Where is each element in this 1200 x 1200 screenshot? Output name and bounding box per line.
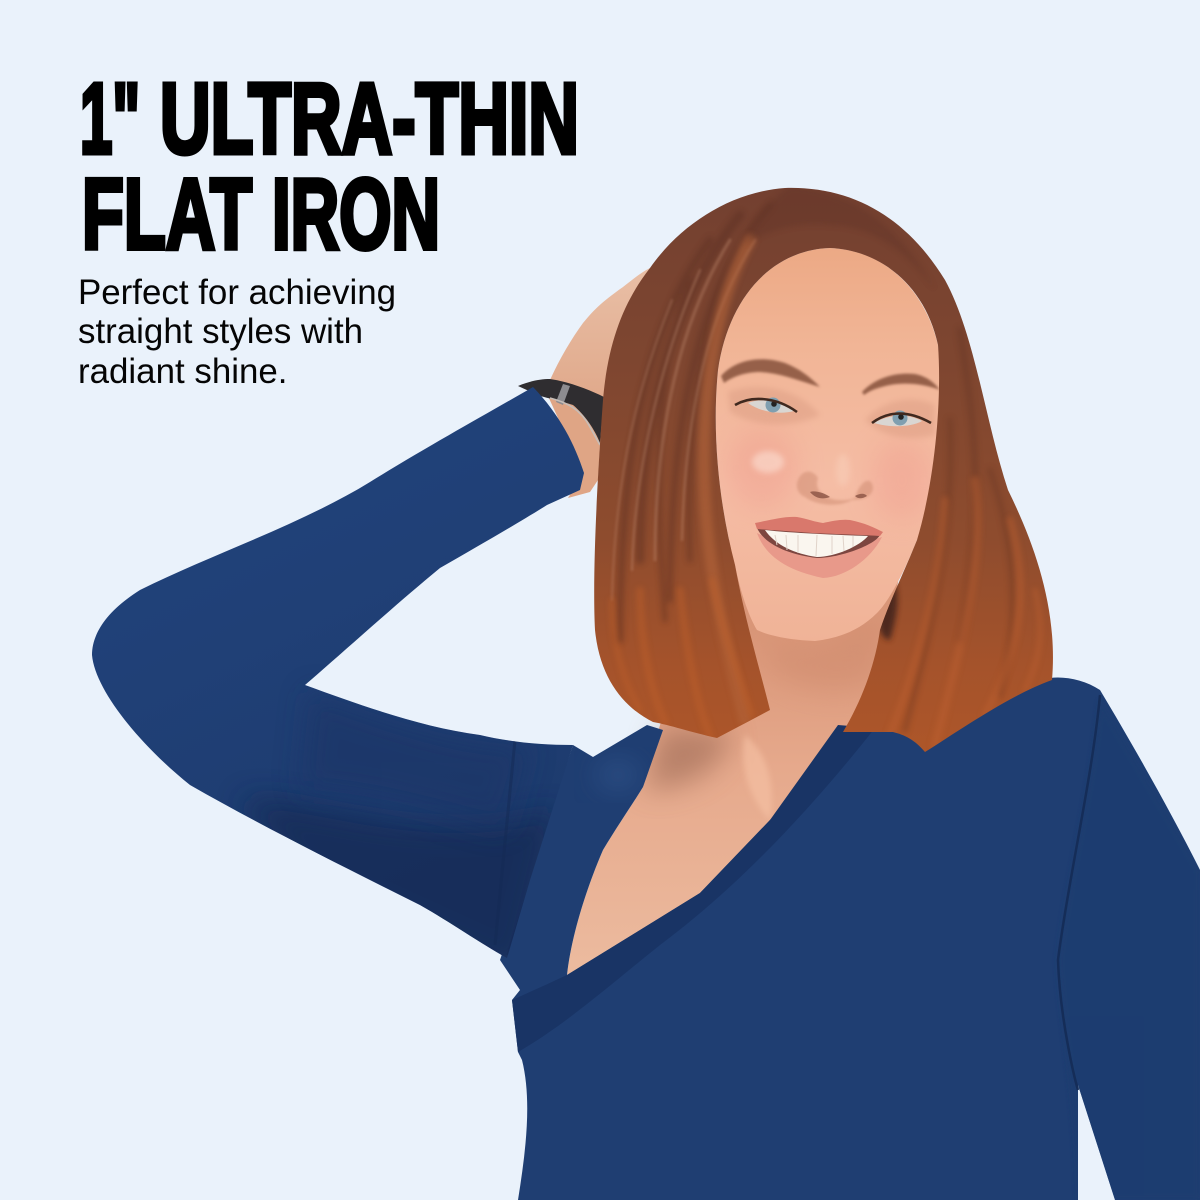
photo: woman with straight bob [92, 186, 1200, 1200]
neck shadow left [645, 728, 730, 790]
face [716, 248, 941, 641]
title line 1: ULTRA-THIN [160, 63, 579, 175]
mouth interior [757, 528, 880, 558]
right orange ends [890, 480, 1040, 745]
title line 2: IRON [272, 158, 440, 270]
metal cuff bracelet [518, 379, 604, 445]
strand beside the face [704, 240, 750, 720]
title line 1: 1" [80, 63, 140, 175]
hair strands [612, 186, 1040, 745]
lower lip [757, 533, 882, 578]
wrist [548, 396, 600, 498]
neckline band and twist [512, 725, 875, 1052]
teeth divisions [775, 535, 853, 556]
under chin shadow [770, 610, 880, 691]
left eyebrow [721, 359, 820, 387]
cheek highlight [752, 451, 784, 473]
body text: radiant shine. [78, 352, 287, 391]
left light bands [612, 240, 755, 600]
right eyebrow [862, 374, 940, 395]
hair [594, 186, 1053, 752]
right cheek blush [870, 440, 934, 520]
left dark bands [620, 205, 770, 640]
dark shadow under jaw [879, 583, 901, 642]
title line 2: FLAT [82, 158, 252, 270]
right strands [905, 330, 1012, 730]
right eye [872, 410, 931, 426]
title line 1 [80, 63, 579, 175]
body text [78, 273, 396, 391]
teeth [765, 530, 868, 557]
nose [797, 454, 873, 505]
neck and chest skin [567, 540, 905, 975]
left eye [735, 398, 797, 413]
upper lip [755, 517, 883, 536]
body text: straight styles with [78, 312, 363, 351]
sweater shading [596, 700, 1200, 1200]
orange ends on the left [610, 582, 716, 726]
raised arm sleeve [92, 387, 584, 980]
eye socket shading [728, 387, 935, 438]
top parting shading [748, 188, 900, 247]
left cheek blush [726, 428, 798, 508]
title line 2 [82, 158, 440, 270]
body text: Perfect for achieving [78, 273, 396, 312]
sweater torso and right sleeve [500, 678, 1200, 1200]
hand in hair [550, 268, 660, 445]
mouth [755, 517, 883, 578]
neck highlight [743, 735, 772, 820]
title [80, 63, 579, 270]
sleeve seam on the right [1058, 695, 1100, 1090]
